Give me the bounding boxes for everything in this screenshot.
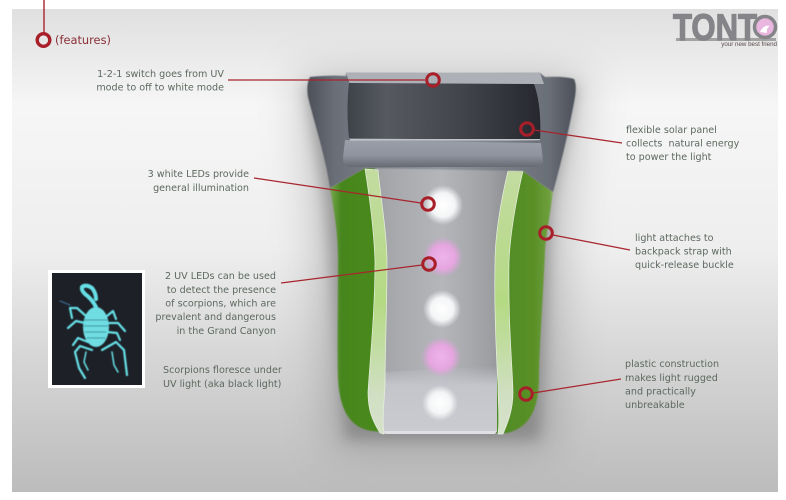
label: scorpions: Scorpions floresce under — [163, 365, 282, 376]
bottom edge — [383, 431, 497, 434]
label: solar panel: collects natural energy — [626, 138, 740, 150]
label: strap: backpack strap with — [635, 246, 732, 258]
label: plastic: plastic construction — [625, 359, 719, 370]
lower bar — [343, 140, 543, 167]
label: UV LEDs: of scorpions, which are — [165, 299, 276, 310]
photo: fluorescent scorpion — [48, 270, 145, 388]
label: strap: light attaches to — [635, 233, 714, 244]
light strip right — [495, 171, 523, 434]
label: switch: 1-2-1 switch goes from UV — [97, 69, 224, 80]
green body right — [490, 171, 553, 433]
product: solar light — [307, 73, 576, 434]
logo: TONTO: your new best friend — [721, 41, 778, 48]
logo: TONTO: TONT — [673, 7, 757, 48]
label: plastic: makes light rugged — [625, 373, 718, 384]
top rim — [346, 73, 544, 84]
label: UV LEDs: prevalent and dangerous — [155, 312, 276, 323]
label: solar panel: to power the light — [626, 152, 712, 163]
label: scorpions: UV light (aka black light) — [163, 379, 281, 390]
label: white LEDs: 3 white LEDs provide — [148, 169, 249, 180]
markers — [37, 34, 552, 400]
label: switch: mode to off to white mode — [96, 82, 224, 93]
LEDs — [421, 185, 463, 421]
label: plastic: unbreakable — [625, 400, 685, 411]
heading: (features) — [55, 33, 111, 47]
label: solar panel: flexible solar panel — [626, 125, 717, 136]
callout lines — [44, 0, 630, 393]
label: strap: quick-release buckle — [635, 260, 734, 271]
cap housing — [307, 73, 576, 192]
label: white LEDs: general illumination — [153, 183, 249, 194]
label: UV LEDs: in the Grand Canyon — [177, 326, 276, 337]
light strip left — [365, 169, 387, 434]
label: UV LEDs: to detect the presence — [167, 285, 276, 296]
label: UV LEDs: 2 UV LEDs can be used — [165, 271, 276, 282]
solar panel — [348, 83, 540, 141]
label: plastic: and practically — [625, 386, 696, 398]
green body left — [330, 168, 392, 432]
centre window — [375, 168, 510, 432]
